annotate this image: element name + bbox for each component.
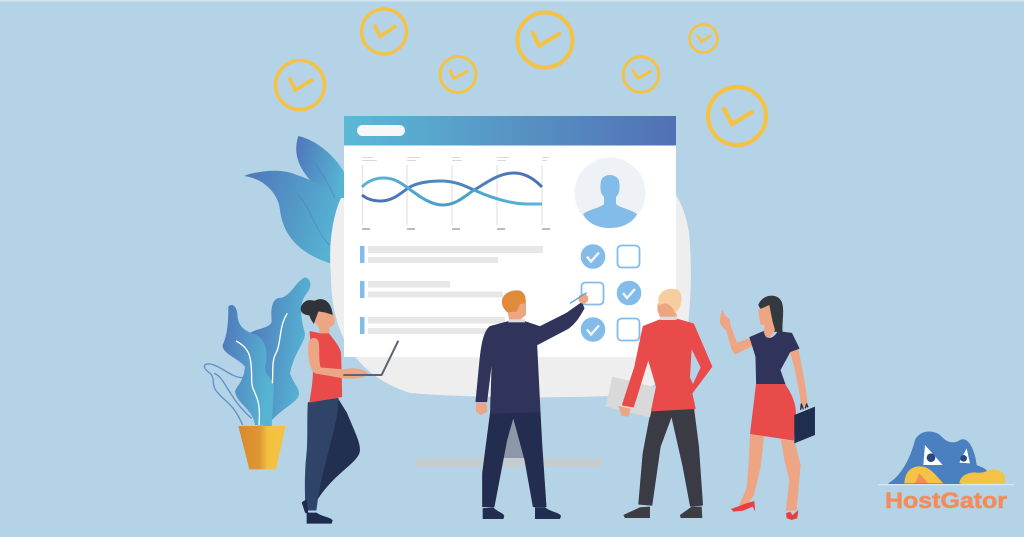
- empty 3: [618, 318, 640, 340]
- HostGator logo: [878, 432, 1014, 513]
- man in navy suit: [476, 290, 588, 519]
- checked 1: [581, 244, 605, 269]
- clock icon 7: [708, 87, 766, 145]
- woman in red skirt with bag: [720, 296, 815, 520]
- header pill: [357, 125, 405, 136]
- logo wordmark: HostGator: [885, 488, 1007, 513]
- briefcase: [794, 404, 815, 443]
- light backdrop blob: [330, 195, 691, 397]
- checked 3: [581, 317, 605, 342]
- list rows: [360, 246, 543, 334]
- dashboard panel: [344, 116, 676, 357]
- clock icon 5: [623, 57, 659, 92]
- clock icon 3: [440, 56, 476, 92]
- panel stand: [415, 397, 603, 467]
- checked 2: [617, 281, 641, 305]
- flower pot: [238, 426, 286, 469]
- panel header: [344, 116, 676, 146]
- folder: [606, 377, 657, 417]
- potted plant: [204, 277, 310, 469]
- empty 2: [582, 282, 604, 304]
- blue leaves behind panel: [244, 136, 347, 267]
- raised arm: [720, 311, 753, 354]
- floating check clocks: [276, 9, 766, 145]
- pen: [570, 293, 587, 303]
- panel body: [344, 145, 676, 357]
- clock icon 6: [690, 24, 718, 52]
- woman with laptop: [301, 299, 398, 524]
- empty 1: [618, 246, 640, 268]
- gator mascot: [878, 432, 1014, 485]
- clock icon 2: [362, 9, 406, 54]
- laptop: [343, 341, 398, 375]
- checkbox grid: [581, 244, 641, 342]
- profile avatar: [574, 158, 646, 228]
- clock icon 4: [518, 12, 572, 68]
- man in red sweater with folder: [606, 289, 712, 518]
- line chart: [362, 157, 550, 230]
- clock icon 1: [276, 60, 324, 110]
